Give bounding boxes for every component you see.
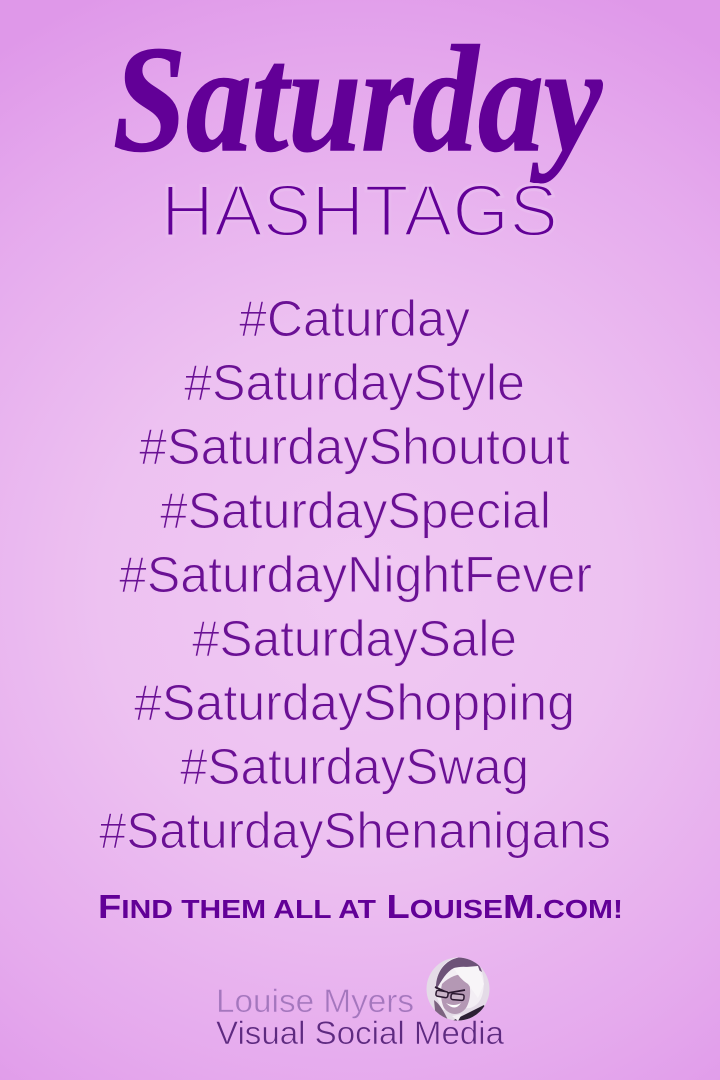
hashtag: SaturdayStyle: #SaturdayStyle xyxy=(184,354,525,411)
hashtag: SaturdayShopping: #SaturdayShopping xyxy=(134,674,575,731)
hashtag list xyxy=(99,290,611,859)
hashtag: SaturdayShoutout: #SaturdayShoutout xyxy=(139,418,570,475)
brand tagline: Visual Social Media: Visual Social Media xyxy=(216,1015,504,1051)
hashtag: SaturdaySwag: #SaturdaySwag xyxy=(180,738,529,795)
hashtag: SaturdaySpecial: #SaturdaySpecial xyxy=(160,482,551,539)
hashtag: SaturdaySale: #SaturdaySale xyxy=(192,610,517,667)
hashtag: Caturday: #Caturday xyxy=(239,290,470,347)
icon: portrait photo xyxy=(426,957,490,1024)
title: Saturday: Saturday xyxy=(113,15,602,183)
brand name: Louise Myers: Louise Myers xyxy=(216,983,414,1019)
hashtag: SaturdayShenanigans: #SaturdayShenanigans xyxy=(99,802,611,859)
subtitle: HASHTAGS: HASHTAGS xyxy=(161,171,558,252)
call to action: FIND THEM ALL AT LOUISE M.COM! xyxy=(98,888,623,925)
hashtag: SaturdayNightFever: #SaturdayNightFever xyxy=(119,546,592,603)
